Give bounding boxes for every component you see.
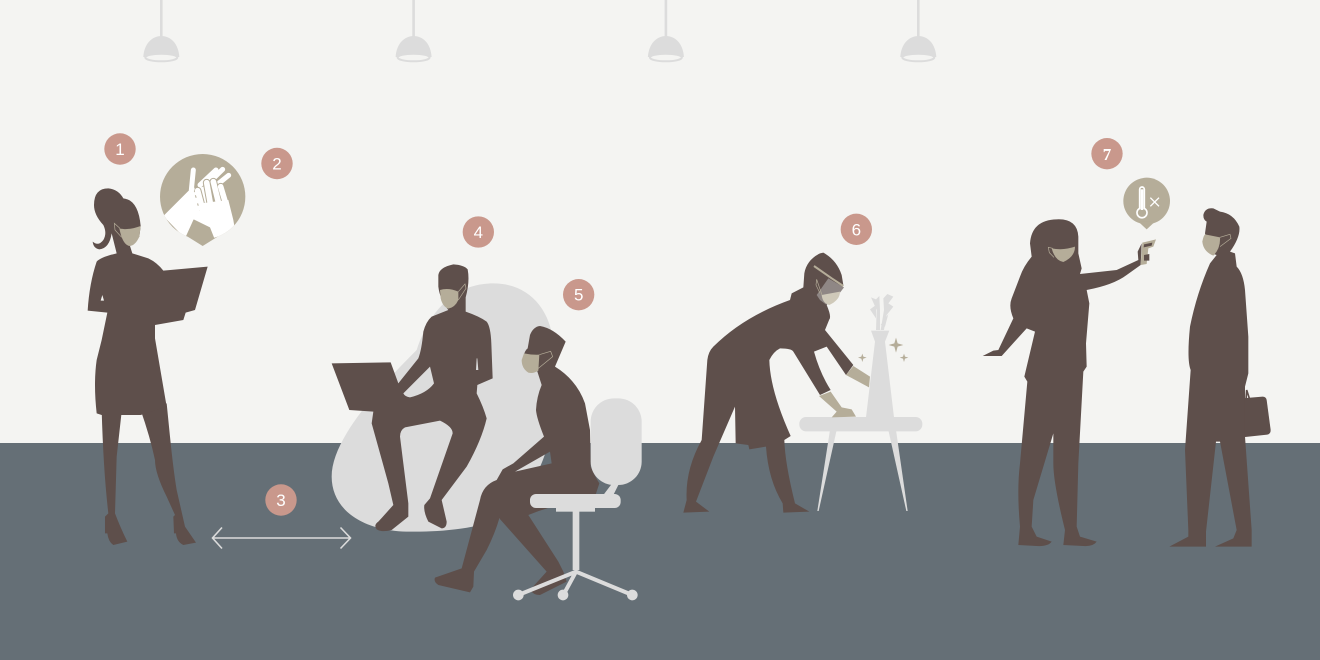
person 4 with laptop [332, 264, 493, 531]
badge 3 [265, 484, 297, 516]
badge 4: 4 [474, 223, 483, 242]
person 6 leaning [683, 253, 853, 513]
badge 7 [1091, 138, 1123, 169]
office chair [513, 398, 642, 600]
sparkles [858, 338, 908, 362]
thermometer [1137, 187, 1147, 218]
badge 5: 5 [574, 286, 583, 305]
mask loop: person 5 [538, 351, 553, 368]
mask loop: person 7 [1048, 247, 1054, 257]
badge 6: 6 [852, 220, 861, 239]
beanbag [332, 283, 555, 532]
vase with plant [866, 294, 894, 417]
mask loop: person with briefcase [1220, 234, 1231, 247]
wall background [0, 0, 1320, 443]
scene: temperature check [983, 138, 1271, 547]
badge 5 [563, 279, 594, 310]
briefcase [1242, 390, 1271, 437]
scene: seated people [332, 216, 642, 600]
table [799, 417, 922, 511]
torso, head and document [88, 188, 208, 415]
person 5 seated [435, 326, 599, 595]
badge 3: 3 [276, 491, 286, 510]
person 7 with thermometer gun [983, 219, 1142, 546]
badge 2 [261, 148, 293, 179]
bubble: temperature [1123, 178, 1170, 229]
thermometer gun [1141, 239, 1156, 265]
badge 7: 7 [1103, 145, 1112, 164]
cross [1150, 198, 1159, 206]
mask: person 6 [822, 292, 840, 305]
front hand [190, 182, 237, 240]
mask loop: person 1 [114, 223, 122, 237]
mask: person 5 [522, 353, 539, 373]
badge 4 [463, 216, 494, 248]
badge 2: 2 [272, 154, 282, 174]
ceiling lamps [143, 0, 936, 61]
mask loop: person 4 [458, 284, 466, 300]
badge 1 [104, 133, 136, 165]
floor [0, 443, 1320, 660]
mask: person 7 [1052, 247, 1075, 262]
soap bubbles [185, 187, 201, 212]
double arrow: distance [212, 528, 350, 548]
left leg [102, 410, 127, 545]
mask: person 1 [119, 226, 141, 246]
badge 6 [841, 214, 872, 245]
bubble: hand washing [160, 154, 245, 246]
mask: person with briefcase [1202, 234, 1220, 256]
gloves [819, 366, 870, 417]
person 1: woman reading document [88, 188, 208, 545]
shield band [814, 266, 843, 286]
scene: person cleaning table [683, 214, 922, 513]
back hand [163, 169, 229, 238]
face shield [817, 278, 844, 305]
person with briefcase [1169, 208, 1252, 547]
mask: person 4 [440, 289, 458, 309]
mask loop: person 6 [816, 279, 822, 295]
badge 1: 1 [115, 140, 125, 159]
right leg [141, 403, 196, 545]
